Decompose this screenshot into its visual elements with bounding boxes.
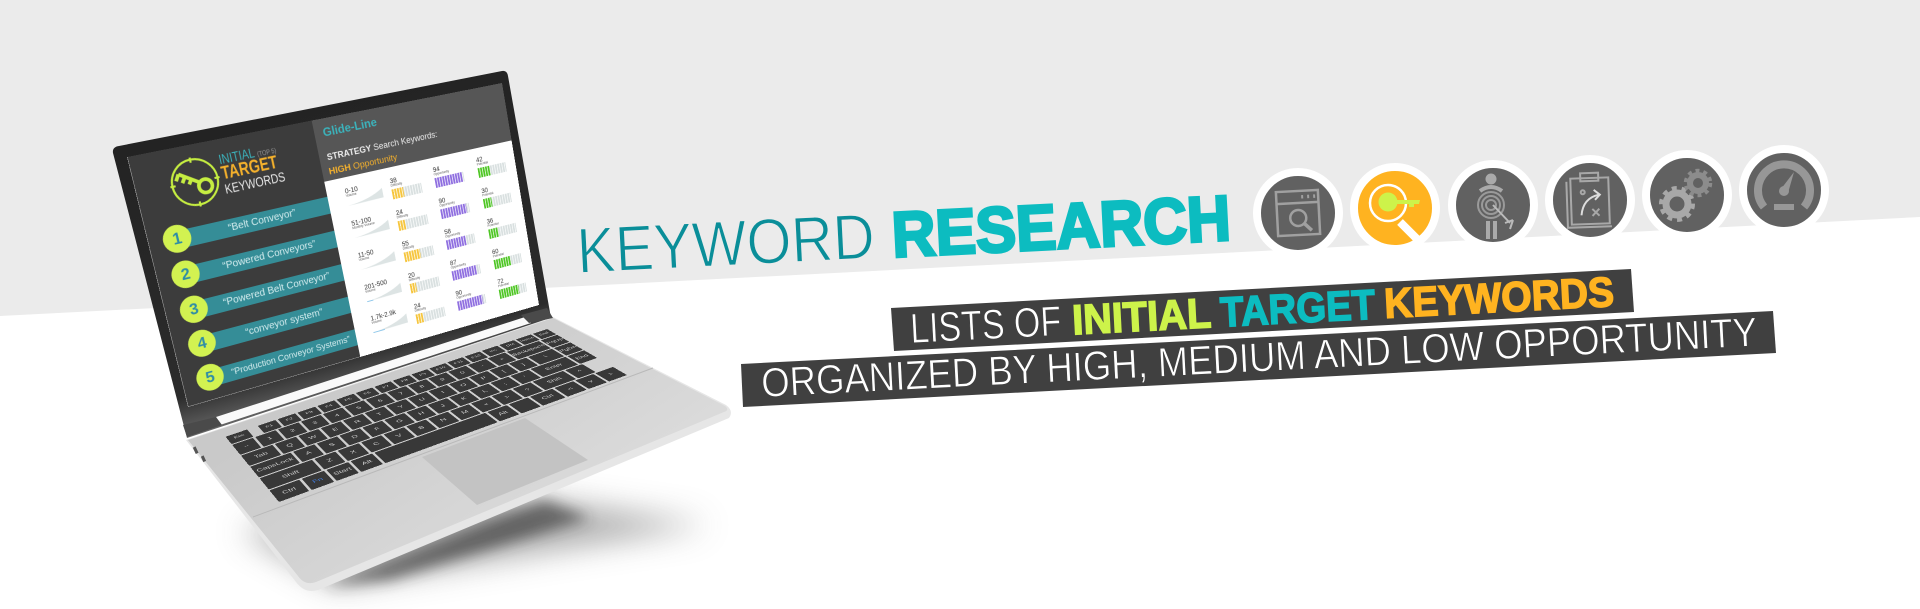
- metric: difficulty 38: Difficulty: [390, 182, 403, 188]
- metric: opportunity 58: Opportunity: [445, 232, 461, 239]
- laptop keyboard: 3: [311, 420, 319, 425]
- metric: potential 30: 30: [481, 186, 488, 195]
- metric: difficulty 38: 38: [389, 176, 397, 185]
- keyword: “Belt Conveyor”: [227, 207, 297, 234]
- laptop keyboard: End: [538, 331, 550, 336]
- laptop keyboard: Shift: [280, 469, 300, 479]
- metric: difficulty 24: Difficulty: [415, 307, 426, 313]
- keyword row 3: [180, 264, 344, 324]
- metric: potential 72: 72: [497, 277, 504, 286]
- laptop keyboard: S: [327, 442, 336, 447]
- laptop keyboard: ?: [523, 387, 532, 392]
- laptop keyboard: O: [458, 382, 468, 387]
- laptop keyboard: B: [417, 425, 426, 430]
- metric: opportunity 90: [455, 288, 486, 311]
- laptop keyboard: Tab: [253, 451, 269, 459]
- metric: volume 11-50: Volume: [359, 256, 370, 262]
- laptop keyboard: v: [586, 379, 595, 383]
- metric: opportunity 90: 90: [455, 288, 463, 297]
- laptop keyboard: 9: [438, 377, 446, 381]
- laptop base: [186, 317, 731, 591]
- metric: potential 36: [486, 216, 517, 239]
- laptop keyboard: F1: [265, 424, 274, 429]
- laptop keyboard: F12: [470, 354, 482, 359]
- laptop keyboard: F5: [344, 397, 353, 402]
- laptop keyboard: F7: [382, 385, 391, 389]
- metric: difficulty 24: Difficulty: [397, 213, 409, 219]
- metric: difficulty 24: [395, 208, 428, 231]
- laptop keyboard: Start: [332, 466, 353, 476]
- number: 2: [179, 264, 192, 284]
- laptop keyboard: Esc: [233, 433, 245, 439]
- laptop keyboard: 5: [355, 405, 363, 410]
- metric: volume 201-500: [364, 278, 402, 302]
- metric: opportunity 94: [432, 165, 465, 188]
- laptop keyboard: CapsLock: [255, 456, 295, 473]
- laptop keyboard: >: [503, 395, 511, 399]
- metric: potential 42: 42: [475, 155, 483, 164]
- number: 1: [171, 229, 184, 248]
- laptop keyboard: ;: [502, 382, 508, 386]
- metric: difficulty 55: 55: [401, 239, 409, 248]
- icon: speedometer: [1743, 149, 1825, 231]
- number: [160, 222, 194, 256]
- laptop keyboard: M: [460, 409, 470, 415]
- laptop keyboard: F10: [435, 366, 447, 371]
- laptop keyboard: Y: [396, 404, 405, 409]
- metric: opportunity 90: Opportunity: [456, 293, 472, 300]
- subtitle box: organized by opportunity: [741, 309, 1776, 407]
- laptop keyboard: <: [482, 402, 491, 407]
- laptop keyboard: [226, 329, 626, 502]
- screen white data panel: [324, 140, 539, 357]
- metric: potential 30: Potential: [482, 192, 494, 197]
- icon: strategy clipboard: [1549, 159, 1631, 241]
- laptop keyboard: K: [459, 396, 468, 401]
- laptop keyboard: F11: [453, 360, 464, 365]
- metric: opportunity 58: 58: [444, 227, 452, 236]
- laptop keyboard: PgDn: [558, 345, 578, 353]
- keyword row 5: [196, 329, 358, 391]
- laptop keyboard: ^: [576, 369, 584, 373]
- metric: potential 36: Potential: [487, 222, 499, 228]
- laptop keyboard: -: [479, 364, 485, 368]
- metric: opportunity 90: [438, 196, 470, 220]
- laptop keyboard: PgUp: [544, 337, 565, 345]
- keyword row 4: [188, 296, 352, 357]
- metric: difficulty 55: Difficulty: [403, 245, 415, 251]
- laptop screen: [127, 83, 539, 407]
- laptop keyboard: U: [417, 397, 427, 402]
- metric: potential 42: [475, 155, 507, 178]
- metric: difficulty 55: [401, 239, 434, 262]
- laptop keyboard: +: [497, 357, 506, 361]
- laptop keyboard: G: [394, 418, 404, 424]
- metric: potential 42: Potential: [477, 161, 488, 167]
- metric: volume 11-50: [357, 248, 396, 270]
- laptop keyboard: L: [480, 389, 489, 393]
- metric: difficulty 20: [407, 271, 440, 294]
- laptop keyboard: F9: [418, 372, 427, 377]
- laptop keyboard: J: [439, 403, 447, 408]
- metric: potential 60: [492, 247, 522, 270]
- laptop keyboard: ': [522, 375, 528, 378]
- logo text: keywords: KEYWORDS: [223, 170, 287, 197]
- metric: opportunity 94: Opportunity: [433, 170, 449, 176]
- metric: volume 51-100: [351, 215, 390, 238]
- metric: potential 30: [481, 186, 512, 209]
- logo text: initial (top 5): INITIAL (TOP 5): [217, 146, 277, 167]
- number: 5: [204, 368, 216, 387]
- text: organized by high, medium and low opportunity: ORGANIZED BY HIGH, MEDIUM AND LOW OPPORTUNITY: [760, 309, 1758, 406]
- title: keyword: KEYWORD: [575, 200, 876, 287]
- laptop keyboard: Alt: [360, 459, 373, 466]
- icon: key search (active): [1354, 167, 1436, 249]
- laptop keyboard: Ctrl: [539, 393, 555, 400]
- right hinge: [521, 308, 553, 323]
- logo text: target: TARGET: [219, 151, 279, 183]
- metric: difficulty 24: 24: [413, 301, 421, 310]
- metric: opportunity 87: 87: [449, 258, 457, 267]
- laptop keyboard: \: [542, 355, 549, 358]
- laptop keyboard: F6: [363, 391, 372, 395]
- hinge strip: [216, 317, 531, 425]
- metric: opportunity 94: 94: [432, 165, 440, 174]
- laptop keyboard: N: [438, 417, 448, 422]
- text: target: TARGET: [1219, 281, 1377, 336]
- metric: difficulty 38: [389, 176, 423, 200]
- metric: volume 0-10: Volume: [346, 192, 357, 198]
- laptop keyboard: F4: [324, 404, 334, 408]
- laptop keyboard: H: [416, 411, 426, 416]
- metric: difficulty 20: 20: [407, 271, 415, 280]
- metric: opportunity 58: [444, 227, 476, 250]
- laptop keyboard: F3: [305, 410, 314, 415]
- laptop keyboard: Z: [325, 457, 334, 463]
- keyword row 1: [162, 196, 331, 254]
- text: keywords: KEYWORDS: [1383, 268, 1615, 327]
- metric: opportunity 87: [449, 258, 481, 281]
- metric: volume 1.7k-2.9k: 1.7k-2.9k: [370, 308, 396, 322]
- laptop keyboard: D: [350, 434, 359, 439]
- bar: [208, 329, 358, 387]
- keyword: “Powered Conveyors”: [221, 238, 317, 272]
- metric: volume 1.7k-2.9k: Volume: [371, 319, 382, 325]
- metric: opportunity 90: Opportunity: [439, 201, 455, 208]
- icon: person with target: [1452, 164, 1534, 246]
- metric: difficulty 24: 24: [395, 208, 403, 217]
- laptop keyboard: W: [307, 434, 318, 440]
- bar: [184, 231, 338, 284]
- laptop keyboard: Shift: [545, 376, 563, 384]
- laptop keyboard: A: [304, 450, 313, 456]
- subtitle box: lists of initial target keywords: [891, 268, 1634, 352]
- laptop keyboard: Fn: [311, 476, 324, 484]
- left hinge: [183, 417, 222, 437]
- laptop keyboard: I: [440, 390, 446, 394]
- keyword row 2: [171, 230, 338, 288]
- keyword: “Powered Belt Conveyor”: [222, 270, 331, 308]
- metric: volume 51-100: 51-100: [351, 215, 372, 227]
- laptop keyboard: 1: [266, 435, 274, 441]
- laptop keyboard: 4: [333, 413, 341, 418]
- touchpad: [422, 418, 588, 505]
- laptop keyboard: Alt: [496, 410, 509, 416]
- brand name: Glide-Line: [322, 116, 378, 140]
- laptop keyboard: T: [375, 411, 384, 417]
- laptop keyboard: E: [331, 427, 340, 432]
- laptop keyboard: X: [348, 449, 358, 455]
- laptop keyboard: ]: [520, 362, 526, 366]
- laptop keyboard: Home: [519, 336, 535, 343]
- metric: difficulty 20: Difficulty: [409, 276, 420, 282]
- laptop keyboard: 0: [458, 370, 466, 375]
- metric: volume 0-10: 0-10: [344, 185, 358, 195]
- number: 4: [196, 333, 208, 353]
- laptop keyboard: P: [479, 376, 488, 380]
- metric: volume 11-50: 11-50: [357, 248, 374, 259]
- key logo icon: [170, 157, 220, 207]
- laptop keyboard: F2: [285, 417, 294, 422]
- keyword: “Production Conveyor Systems”: [230, 334, 351, 377]
- laptop keyboard: V: [394, 433, 404, 438]
- laptop keyboard: Del: [505, 343, 516, 347]
- screen header panel: [312, 83, 512, 182]
- metric: volume 201-500: Volume: [365, 288, 376, 294]
- text: lists of: LISTS OF: [909, 297, 1062, 352]
- laptop keyboard: 7: [397, 391, 405, 396]
- laptop keyboard: C: [371, 441, 381, 446]
- laptop keyboard: R: [353, 419, 362, 424]
- laptop keyboard: Ctrl: [280, 486, 297, 495]
- metric: opportunity 87: Opportunity: [451, 263, 466, 270]
- metric: volume 51-100: Monthly Volume: [352, 222, 375, 230]
- laptop keyboard: 6: [376, 398, 384, 403]
- laptop keyboard: 8: [418, 384, 426, 388]
- laptop keyboard: 2: [289, 428, 296, 433]
- laptop keyboard: F8: [400, 378, 409, 383]
- icon: gears: [1646, 154, 1728, 236]
- number: [185, 327, 219, 360]
- metric: potential 60: Potential: [493, 252, 504, 258]
- laptop keyboard: F: [373, 426, 382, 431]
- number: [177, 293, 211, 326]
- bar: [192, 264, 345, 319]
- number: [194, 361, 226, 394]
- strategy heading: STRATEGY Search Keywords:: [326, 129, 438, 162]
- metric: volume 1.7k-2.9k: [370, 308, 408, 333]
- number: 3: [187, 299, 200, 319]
- metric: potential 72: [497, 277, 527, 299]
- metric: potential 72: Potential: [498, 282, 509, 288]
- laptop shadow: [240, 490, 710, 586]
- metric: potential 36: 36: [486, 216, 494, 225]
- keyword: “conveyor system”: [245, 307, 324, 338]
- bar: [175, 197, 331, 249]
- metric: difficulty 24: [413, 301, 446, 324]
- laptop keyboard: <: [565, 386, 575, 391]
- icon: browser search: [1257, 172, 1339, 254]
- bar: [200, 297, 351, 353]
- laptop lid: [113, 71, 551, 438]
- laptop keyboard: Enter: [543, 362, 564, 371]
- laptop keyboard: ~: [243, 443, 250, 449]
- metric: potential 60: 60: [492, 247, 499, 256]
- metric: opportunity 90: 90: [438, 196, 446, 205]
- metric: volume 0-10: [344, 185, 384, 206]
- laptop keyboard: Q: [285, 442, 294, 448]
- laptop keyboard: Backspace: [510, 343, 546, 357]
- title: research: RESEARCH: [890, 182, 1232, 271]
- laptop keyboard: Ins: [488, 349, 498, 353]
- background: grey slanted band: [0, 0, 1920, 316]
- number: [169, 258, 202, 291]
- text: initial: INITIAL: [1071, 289, 1212, 343]
- laptop keyboard: [: [500, 369, 507, 373]
- opportunity heading: HIGH Opportunity: [328, 152, 398, 177]
- laptop keyboard: End: [573, 353, 590, 360]
- metric: volume 201-500: 201-500: [364, 278, 388, 291]
- laptop keyboard: >: [606, 372, 615, 376]
